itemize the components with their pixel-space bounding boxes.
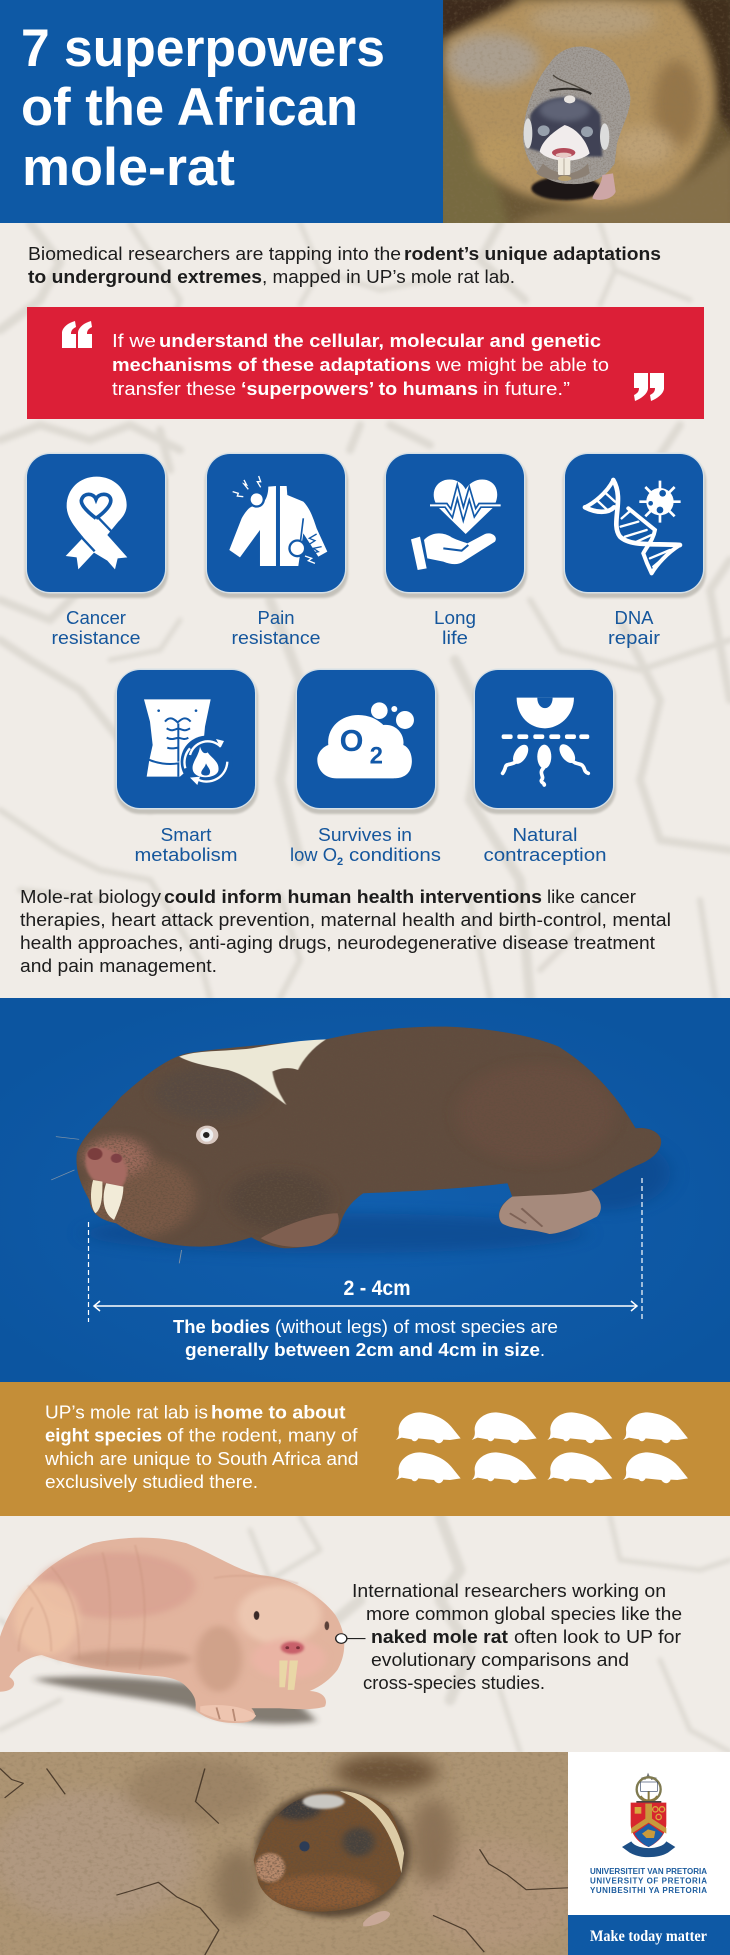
intro text: Biomedical researchers are tapping into the (28, 244, 401, 264)
logo text (590, 1867, 707, 1895)
text block: health interventions (20, 887, 671, 976)
mole head (251, 1787, 410, 1926)
text block: health interventions: health approaches, anti-aging drugs, neurodegenerative disease treatment (20, 933, 655, 953)
intro text: to underground extremes (28, 267, 262, 287)
intro text: rodent’s unique adaptations (404, 244, 661, 264)
species text (44, 1402, 359, 1492)
text block: naked mole rat: International researchers working on (352, 1581, 666, 1601)
quote text (112, 331, 609, 399)
quote text: transfer these (112, 379, 236, 399)
logo crest (622, 1773, 675, 1857)
size label: 2 - 4cm (344, 1277, 410, 1300)
label: DNA repair: repair (608, 628, 660, 648)
O2 glyphs: O (340, 724, 364, 758)
card: low oxygen (295, 668, 438, 814)
species text: exclusively studied there. (45, 1472, 258, 1492)
label: pain resistance: resistance (232, 628, 320, 648)
panel: red quote (27, 307, 704, 419)
label: DNA repair (608, 608, 660, 648)
label: pain resistance: Pain (258, 608, 294, 628)
title (21, 19, 385, 197)
O2 glyphs (340, 724, 383, 770)
intro text: , mapped in UP’s mole rat lab. (262, 267, 515, 287)
card: natural contraception (473, 668, 616, 814)
O2 glyphs: 2 (370, 743, 383, 770)
photo: mole-rat side view (51, 1023, 670, 1263)
logo text: YUNIBESITHI YA PRETORIA (590, 1886, 707, 1895)
size description: (without legs) of most species are (275, 1317, 558, 1337)
text block: naked mole rat: naked mole rat (371, 1627, 508, 1647)
label: long life: Long (434, 608, 476, 628)
label: cancer resistance: resistance (52, 628, 140, 648)
quote text: understand the cellular, molecular and genetic (159, 331, 601, 351)
tagline bar: Make today matter (590, 1928, 707, 1945)
label: low oxygen (290, 825, 441, 868)
text block: naked mole rat: evolutionary comparisons and (371, 1650, 629, 1670)
callout marker (336, 1634, 365, 1643)
label: natural contraception (484, 825, 606, 865)
photo: mole-rat in soil burrow (0, 1752, 573, 1955)
text block: naked mole rat (352, 1581, 682, 1693)
size description: . (540, 1340, 545, 1360)
label: low oxygen: 2 (337, 856, 343, 868)
photo: mole-rat in burrow (436, 0, 730, 230)
header panel (0, 0, 443, 223)
icon: opening quote mark (62, 321, 92, 348)
text block: naked mole rat: cross-species studies. (363, 1673, 545, 1693)
label: natural contraception: Natural (512, 825, 578, 845)
label: long life: life (442, 628, 468, 648)
title: 7 superpowers (21, 19, 385, 78)
text block: health interventions: could inform human health interventions (164, 887, 542, 907)
logo text: UNIVERSITY OF PRETORIA (590, 1876, 707, 1886)
card: DNA repair (563, 452, 706, 598)
panel: university logo (568, 1752, 730, 1955)
text block: naked mole rat: often look to UP for (514, 1627, 681, 1647)
quote text: ‘superpowers’ to humans (241, 379, 478, 399)
label: natural contraception: contraception (484, 845, 606, 865)
label: smart metabolism (134, 825, 238, 865)
card: long life (384, 452, 527, 598)
quote text: mechanisms of these adaptations (112, 355, 431, 375)
size description: The bodies (173, 1317, 270, 1337)
tagline bar (568, 1915, 730, 1955)
text block: naked mole rat: more common global species like the (366, 1604, 682, 1624)
species text: which are unique to South Africa and (44, 1449, 358, 1469)
quote text: we might be able to (435, 355, 609, 375)
arrow: size span (88, 1178, 642, 1322)
size description: generally between 2cm and 4cm in size (185, 1340, 540, 1360)
icon: closing quote mark (634, 373, 664, 401)
label: smart metabolism: metabolism (134, 845, 238, 865)
species text: of the rodent, many of (167, 1426, 359, 1446)
species text: UP’s mole rat lab is (45, 1402, 208, 1422)
text block: health interventions: Mole-rat biology (20, 887, 161, 907)
panel: eight species (0, 1382, 730, 1516)
size description (173, 1317, 558, 1360)
quote text: If we (112, 331, 156, 351)
intro text (28, 244, 661, 287)
card: cancer resistance (25, 452, 168, 598)
quote text: in future.” (483, 379, 570, 399)
label: long life (434, 608, 476, 648)
title: of the African (21, 78, 358, 137)
species text: eight species (45, 1426, 162, 1446)
label: low oxygen: conditions (349, 845, 441, 865)
text block: health interventions: and pain management. (20, 956, 217, 976)
card: smart metabolism (115, 668, 258, 814)
label: smart metabolism: Smart (160, 825, 212, 845)
label: cancer resistance: Cancer (66, 608, 126, 628)
photo: naked mole rat (0, 1538, 344, 1724)
species text: home to about (211, 1402, 346, 1422)
panel: seven superpowers icon grid (25, 452, 706, 868)
label: low oxygen: low O (290, 845, 337, 865)
title: mole-rat (22, 138, 235, 197)
label: low oxygen: Survives in (318, 825, 412, 845)
label: pain resistance (232, 608, 320, 648)
text block: health interventions: like cancer (547, 887, 636, 907)
card: pain resistance (205, 452, 348, 598)
logo text: UNIVERSITEIT VAN PRETORIA (590, 1867, 707, 1876)
panel: body size (0, 998, 730, 1382)
text block: health interventions: therapies, heart attack prevention, maternal health and birth-control, mental (20, 910, 671, 930)
label: DNA repair: DNA (614, 608, 654, 628)
icon: eight mole-rat silhouettes (396, 1412, 688, 1483)
label: cancer resistance (52, 608, 140, 648)
